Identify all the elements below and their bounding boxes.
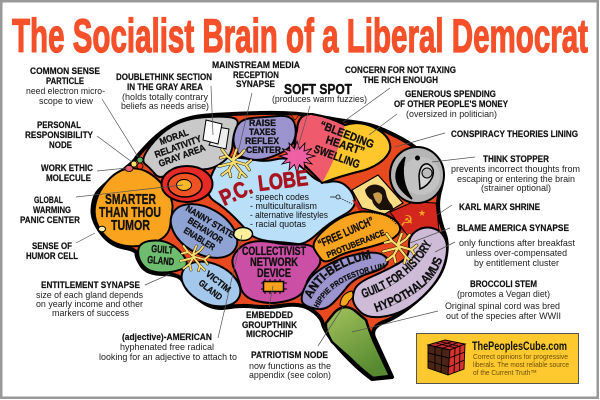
label: collectivist network device <box>242 246 306 280</box>
callout: adjective-American: (adjective)-AMERICAN <box>122 332 212 343</box>
region: anti-bellum lump <box>302 253 388 309</box>
callout: patriotism node: appendix (see colon) <box>249 370 331 381</box>
callout: global warming panic center: PANIC CENTER <box>20 215 80 226</box>
callout: mainstream media reception synapse: MAINSTREAM MEDIA <box>212 60 300 71</box>
callout: common sense particle: need electron micro- <box>26 86 105 97</box>
callout: common sense particle: PARTICLE <box>46 76 84 87</box>
label: raise taxes reflex center <box>245 118 281 156</box>
callout: think stopper: (strainer optional) <box>481 183 551 194</box>
callout: patriotism node: now functions as the <box>249 361 331 372</box>
label: bleeding heart swelling: “BLEEDING <box>318 120 375 151</box>
label: raise taxes reflex center: REFLEX <box>245 136 280 147</box>
callout: broccoli stem: BROCCOLI STEM <box>470 279 537 290</box>
label: P.C. lobe heading: LOBE <box>257 165 309 196</box>
callout: broccoli stem: (promotes a Vegan diet) <box>457 289 550 300</box>
text: P.C. lobe list: - racial quotas <box>250 219 306 229</box>
callout: blame america synapse: BLAME AMERICA SYNAPSE <box>457 223 569 234</box>
callout: personal responsibility node: RESPONSIBILITY <box>25 130 94 141</box>
label: moral relativity gray area: MORAL <box>158 127 190 148</box>
panel: ThePeoplesCube.com ad: ThePeoplesCube.com <box>472 341 567 353</box>
callout: think stopper: prevents incorrect thoughts from <box>451 164 580 175</box>
callout: concern for not taxing the rich: CONCERN FOR NOT TAXING <box>345 65 456 76</box>
callout: generous spending: OF OTHER PEOPLE'S MONEY <box>394 99 509 110</box>
callout: generous spending: (oversized in politician) <box>406 109 497 120</box>
callout: embedded groupthink microchip: MICROCHIP <box>246 329 294 340</box>
callout: entitlement synapse: markers of success <box>52 308 129 319</box>
callout: global warming panic center: WARMING <box>33 205 71 216</box>
icon: hammer and sickle panel <box>390 202 439 236</box>
icon: rubik's cube <box>428 340 465 375</box>
region: victim gland <box>174 253 248 315</box>
callout: global warming panic center: GLOBAL <box>34 195 63 206</box>
callout: adjective-American: looking for an adjective to attach to <box>99 352 237 363</box>
callout: work ethic molecule: MOLECULE <box>46 173 91 184</box>
panel: ThePeoplesCube.com ad <box>416 334 578 384</box>
icon: hammer and sickle panel: ☭ <box>400 212 413 230</box>
callout: think stopper <box>451 154 580 194</box>
icon: doublethink papers <box>203 120 229 149</box>
callout: soft spot: (produces warm fuzzies) <box>272 94 367 105</box>
label: moral relativity gray area: GRAY AREA <box>157 143 207 170</box>
callout: adjective-American <box>99 332 237 363</box>
callout: personal responsibility node: PERSONAL <box>37 120 81 131</box>
label: collectivist network device: DEVICE <box>257 268 291 280</box>
callout: sense of humor cell: SENSE OF <box>32 241 72 252</box>
label: free lunch protuberance <box>316 215 386 260</box>
label: raise taxes reflex center: TAXES <box>249 127 276 138</box>
label: guilt gland <box>147 243 175 268</box>
label: collectivist network device: COLLECTIVIST <box>242 246 306 258</box>
callout: sense of humor cell <box>26 241 78 262</box>
icon: Karl Marx shrine poster <box>352 175 403 214</box>
region: guilt for history hypothalamus <box>353 227 447 317</box>
icon: embedded microchip <box>261 279 287 294</box>
dark red area under Che poster <box>352 200 410 236</box>
text: P.C. lobe list: - speech codes <box>250 192 309 202</box>
callout: common sense particle <box>26 66 105 107</box>
callout: doublethink section: DOUBLETHINK SECTION <box>116 72 212 83</box>
callout: blame america synapse: only functions after breakfast <box>459 238 575 249</box>
callout: global warming panic center <box>20 195 80 226</box>
icon: patriotism node <box>340 291 353 306</box>
label: bleeding heart swelling <box>312 120 375 171</box>
text: P.C. lobe list: - alternative lifestyles <box>250 210 328 220</box>
label: victim gland: GLAND <box>197 278 225 302</box>
icon: tumor target <box>162 166 212 202</box>
label: smarter than thou tumor: SMARTER <box>105 192 156 208</box>
region: bleeding heart <box>295 114 390 183</box>
synapse: entitlement <box>180 246 209 271</box>
label: P.C. lobe heading <box>216 165 309 211</box>
callout: embedded groupthink microchip: EMBEDDED <box>246 310 293 321</box>
label: free lunch protuberance: “FREE LUNCH” <box>316 215 376 251</box>
callout: common sense particle: COMMON SENSE <box>30 66 100 77</box>
region: smarter than thou tumor <box>95 168 173 246</box>
label: guilt for history hypothalamus: HYPOTHALAMUS <box>374 257 442 312</box>
callout: mainstream media reception synapse <box>212 60 300 90</box>
label: victim gland <box>197 269 233 302</box>
callout: soft spot: SOFT SPOT <box>284 81 352 98</box>
region: free lunch protuberance <box>314 211 400 261</box>
brain silhouette <box>92 113 447 379</box>
free radical: yellow cell <box>234 228 252 240</box>
callout: karl marx shrine: KARL MARX SHRINE <box>459 202 540 213</box>
callout: broccoli stem: out of the species after WWII <box>446 311 561 322</box>
label: moral relativity gray area: RELATIVITY <box>153 134 204 161</box>
panel: ThePeoplesCube.com ad: Correct opinions for progressive <box>473 352 568 361</box>
label: guilt for history hypothalamus: GUILT FOR HISTORY <box>362 239 431 298</box>
label: nanny state behavior enabler: ENABLER <box>182 225 217 252</box>
label: raise taxes reflex center: CENTER <box>246 145 281 156</box>
callout: soft spot <box>272 81 367 105</box>
callout: entitlement synapse <box>36 280 143 319</box>
callout: embedded groupthink microchip: GROUPTHINK <box>242 320 297 331</box>
callout: concern for not taxing the rich <box>345 65 456 86</box>
callout: blame america synapse: unless over-compensated <box>466 248 567 259</box>
icon: common sense particles <box>125 157 143 172</box>
region: raise taxes reflex center <box>233 116 296 160</box>
icon: hammer and sickle panel: ★ <box>418 209 426 219</box>
synapse: blame America <box>383 234 417 263</box>
callout: mainstream media reception synapse: RECEPTION <box>233 70 279 81</box>
callout: blame america synapse <box>457 223 575 269</box>
starburst: soft spot <box>279 141 315 173</box>
label: collectivist network device: NETWORK <box>250 257 299 269</box>
text: P.C. lobe list <box>250 192 328 229</box>
callout: mainstream media reception synapse: SYNAPSE <box>236 79 275 90</box>
callout: blame america synapse: by entitlement cluster <box>474 258 559 269</box>
icon: free radical hook <box>330 195 352 204</box>
callout: entitlement synapse: on yearly income and other <box>36 299 143 310</box>
synapse: mainstream media reception <box>219 149 251 177</box>
region: nanny state behavior enabler <box>161 193 247 269</box>
label: nanny state behavior enabler: NANNY STATE <box>184 203 236 240</box>
label: bleeding heart swelling: HEART” <box>324 134 366 158</box>
callout: personal responsibility node: NODE <box>49 140 72 151</box>
region: moral relativity gray area <box>143 117 238 177</box>
brain illustration <box>92 113 447 379</box>
label: guilt gland: GUILT <box>151 243 174 257</box>
callout: doublethink section: beliefs as needs arise) <box>121 101 209 112</box>
label: raise taxes reflex center: RAISE <box>249 118 276 129</box>
region: broccoli stem <box>326 307 390 378</box>
label: moral relativity gray area <box>153 127 207 170</box>
callout: generous spending: GENEROUS SPENDING <box>405 89 496 100</box>
callout: broccoli stem <box>445 279 561 322</box>
label: nanny state behavior enabler: BEHAVIOR <box>186 215 225 246</box>
icon: sense of humor cell <box>98 226 106 232</box>
label: anti-bellum hippie protestor lump: ANTI-BELLUM <box>304 250 371 299</box>
callout: work ethic molecule <box>41 163 93 184</box>
callout: doublethink section: IN THE GRAY AREA <box>127 82 203 93</box>
callout: personal responsibility node <box>25 120 94 151</box>
callout: patriotism node <box>249 350 331 381</box>
callout: broccoli stem: Original spinal cord was bred <box>445 301 560 312</box>
callout: entitlement synapse: ENTITLEMENT SYNAPSE <box>41 280 140 291</box>
callout: doublethink section: (holds totally contrary <box>122 92 208 103</box>
region: collectivist network device <box>232 241 320 303</box>
callout: work ethic molecule: WORK ETHIC <box>41 163 93 174</box>
icon: think stopper <box>390 147 444 203</box>
label: smarter than thou tumor: THAN THOU <box>99 205 161 221</box>
callout: common sense particle: scope to view <box>39 96 93 107</box>
label: smarter than thou tumor <box>99 192 161 234</box>
region: guilt gland <box>138 240 187 273</box>
callout: entitlement synapse: size of each gland depends <box>36 290 143 301</box>
callout: think stopper: escaping or entering the brain <box>457 174 575 185</box>
callout: conspiracy theories lining: CONSPIRACY THEORIES LINING <box>451 129 578 140</box>
callout: generous spending <box>394 89 509 120</box>
callout: embedded groupthink microchip <box>242 310 297 340</box>
label: bleeding heart swelling: SWELLING <box>312 144 361 171</box>
label: victim gland: VICTIM <box>204 269 233 294</box>
label: P.C. lobe heading: P.C. <box>216 174 256 211</box>
leader lines <box>76 86 475 346</box>
label: anti-bellum hippie protestor lump: HIPPIE PROTESTOR LUMP <box>314 262 386 308</box>
callout: think stopper: THINK STOPPER <box>483 154 549 165</box>
label: free lunch protuberance: PROTUBERANCE <box>325 227 386 260</box>
dotted seam on free lunch <box>362 212 397 225</box>
region: P.C. lobe <box>208 157 355 244</box>
callout: adjective-American: hyphenated free radical <box>120 342 214 353</box>
callout: sense of humor cell: HUMOR CELL <box>26 251 78 262</box>
callout: concern for not taxing the rich: THE RICH ENOUGH <box>363 75 438 86</box>
text: P.C. lobe list: - multiculturalism <box>250 201 317 211</box>
callout: doublethink section <box>116 72 212 112</box>
label: anti-bellum hippie protestor lump <box>304 250 386 308</box>
panel: ThePeoplesCube.com ad: liberals. The most reliable source <box>473 360 569 369</box>
panel: ThePeoplesCube.com ad: of the Current Truth™ <box>473 368 537 377</box>
callout: patriotism node: PATRIOTISM NODE <box>251 350 328 361</box>
icon: red triangle <box>291 115 299 120</box>
label: guilt gland: GLAND <box>147 254 175 268</box>
label: smarter than thou tumor: TUMOR <box>111 218 150 234</box>
